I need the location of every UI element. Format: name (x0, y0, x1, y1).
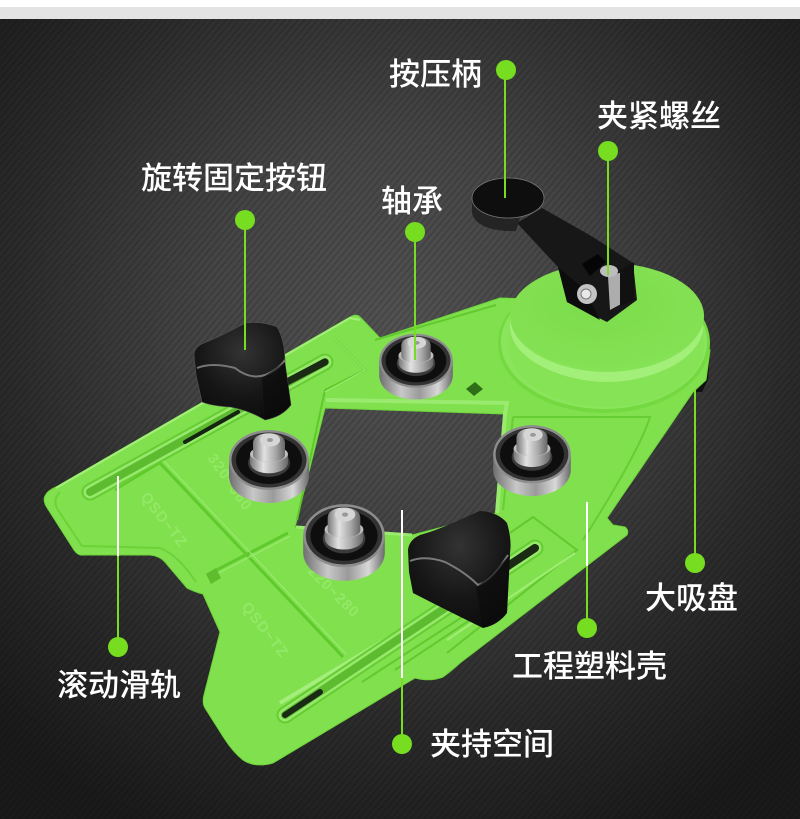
embossed markings: QSD~TZ (137, 489, 191, 551)
suction cup (498, 263, 710, 413)
sliding slots (90, 362, 535, 715)
embossed markings (137, 382, 483, 661)
rotary knob: upper left (194, 322, 291, 420)
callout: 滚动滑轨 (57, 476, 181, 703)
bearing: bottom (303, 504, 385, 581)
callout: 夹紧螺丝 (597, 99, 721, 275)
callout: 轴承: 轴承 (381, 184, 443, 219)
plastic plate shell (44, 298, 710, 765)
callout: 按压柄 (389, 57, 516, 198)
bearing: left (229, 430, 309, 503)
callout: 大吸盘 (645, 390, 738, 616)
press handle (472, 178, 637, 322)
bearing: top (379, 334, 453, 400)
top grey band (0, 7, 800, 19)
embossed markings: QSD~TZ (238, 599, 292, 661)
embossed markings: 320~360 (204, 451, 255, 514)
callout: 按压柄: 按压柄 (389, 57, 482, 92)
callout: 旋转固定按钮 (141, 161, 327, 350)
product: hole saw guide tool (44, 178, 710, 765)
inner panel outlines (55, 305, 650, 703)
callout: 滚动滑轨: 滚动滑轨 (57, 668, 181, 703)
callout: 夹持空间 (392, 510, 554, 762)
callout: 大吸盘: 大吸盘 (645, 581, 738, 616)
top white band (0, 0, 800, 7)
embossed markings: 220~280 (304, 563, 363, 621)
rotary knob: lower right (408, 511, 511, 628)
callout: 工程塑料壳 (512, 502, 667, 684)
clamp screw (577, 265, 618, 304)
callout: 轴承 (381, 184, 443, 360)
callout: 夹紧螺丝: 夹紧螺丝 (597, 99, 721, 134)
callout: 工程塑料壳: 工程塑料壳 (512, 649, 667, 684)
callout: 夹持空间: 夹持空间 (430, 727, 554, 762)
callout: 旋转固定按钮: 旋转固定按钮 (141, 161, 327, 196)
bearing: right (493, 425, 571, 496)
